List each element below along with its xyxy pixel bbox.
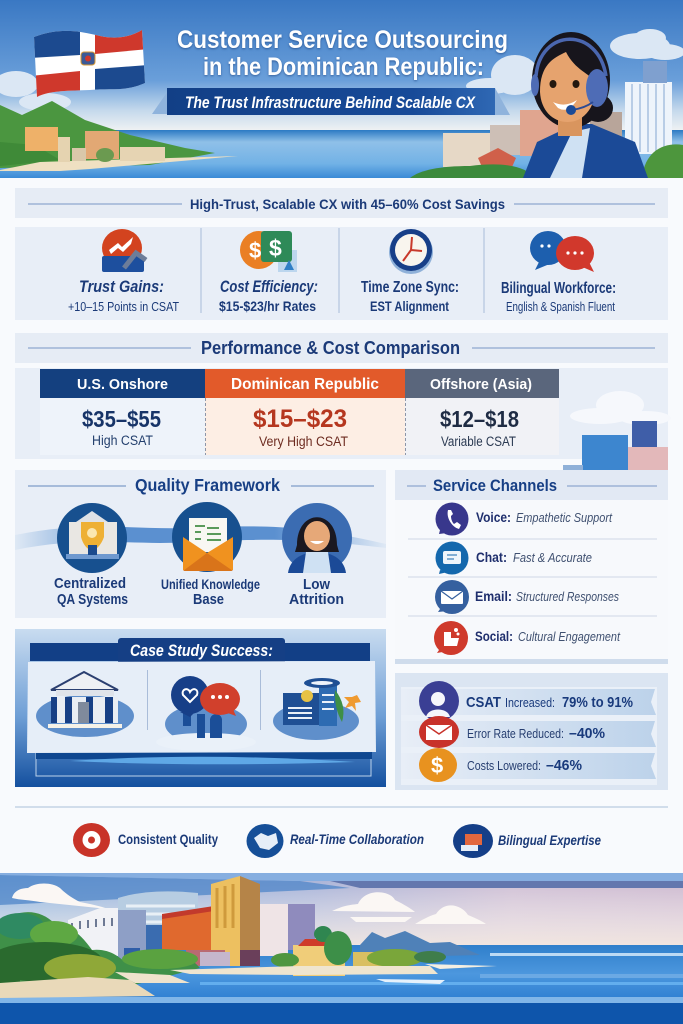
channel: voice: Voice: <box>476 509 511 525</box>
text: trust gains: +10–15 Points in CSAT <box>68 300 179 314</box>
column: Dominican Republic: Very High CSAT <box>259 434 348 449</box>
panel: comparison table <box>15 368 671 470</box>
tagline strip <box>15 188 668 218</box>
text: bilingual: Bilingual Workforce: <box>501 280 616 297</box>
text: time zone <box>361 279 459 314</box>
channel: social: Cultural Engagement <box>518 629 621 644</box>
metric: CSAT: CSAT <box>466 694 501 711</box>
channel: email <box>435 580 619 614</box>
mountains <box>360 931 480 958</box>
beaches <box>0 977 155 998</box>
subtitle ribbon <box>152 88 510 115</box>
metric: costs: –46% <box>546 757 582 774</box>
channel: social <box>434 621 621 655</box>
benefit: bilingual expertise <box>453 824 601 858</box>
metric: CSAT: Increased: <box>505 695 555 710</box>
metric: error rate: Error Rate Reduced: <box>467 726 564 741</box>
icon: bank <box>36 672 134 737</box>
text: time zone: Time Zone Sync: <box>361 279 459 296</box>
title: in the Dominican Republic: <box>203 53 484 81</box>
title: Customer Service Outsourcing <box>177 26 508 54</box>
channel: chat <box>436 542 592 574</box>
panel: service channels <box>395 470 668 664</box>
metric: CSAT: 79% to 91% <box>562 694 633 711</box>
text: cost efficiency <box>219 278 318 314</box>
text: bilingual: English & Spanish Fluent <box>506 300 615 314</box>
tagline strip: High-Trust, Scalable CX with 45–60% Cost Savings <box>190 196 505 212</box>
flag <box>34 30 145 97</box>
labels: Centralized <box>54 575 126 592</box>
metric: costs <box>419 748 582 782</box>
channel: chat: Fast & Accurate <box>513 550 592 565</box>
benefit: consistent quality: Consistent Quality <box>118 831 218 847</box>
labels: Base <box>193 591 224 608</box>
icon: trust gains <box>102 229 146 272</box>
metric: error rate: –40% <box>569 725 605 742</box>
icon: clock <box>389 229 433 274</box>
labels: Low <box>303 576 330 593</box>
column: U.S. onshore: $35–$55 <box>82 406 161 432</box>
footer coastal scene <box>0 873 683 1024</box>
panel: key benefits <box>15 227 668 320</box>
text: trust gains <box>68 277 179 314</box>
icon: heart and chat bubbles <box>156 676 256 751</box>
labels: QA Systems <box>57 591 128 608</box>
text: time zone: EST Alignment <box>370 298 449 314</box>
agent illustration <box>523 32 648 178</box>
icon: cost efficiency: $ <box>269 235 282 261</box>
heading: performance comparison: Performance & Cost Comparison <box>201 338 460 358</box>
benefit: bilingual expertise: Bilingual Expertise <box>498 832 601 848</box>
channel: email: Email: <box>475 588 512 604</box>
channel: voice: Empathetic Support <box>516 510 613 525</box>
labels <box>54 575 344 608</box>
case study title tab: Case Study Success: <box>130 642 273 660</box>
text: cost efficiency: $15-$23/hr Rates <box>219 298 316 314</box>
channel: chat: Chat: <box>476 549 507 565</box>
panel: quality framework: Quality Framework <box>135 475 280 495</box>
column: U.S. onshore <box>40 369 205 455</box>
metric: CSAT <box>419 681 633 721</box>
header banner <box>0 0 683 178</box>
left hill and beach <box>0 101 215 168</box>
channel: email: Structured Responses <box>516 589 619 604</box>
benefit: real-time collaboration <box>246 824 424 858</box>
column: U.S. onshore: High CSAT <box>92 433 153 448</box>
buildings <box>68 876 383 976</box>
text: trust gains: Trust Gains: <box>79 277 164 296</box>
city illustration <box>563 391 671 470</box>
clouds <box>0 29 683 111</box>
labels: Unified Knowledge <box>161 576 260 592</box>
column: Dominican Republic <box>205 369 405 455</box>
right foliage <box>410 164 535 178</box>
channel: voice <box>436 502 613 536</box>
icon: documents and star <box>273 678 361 740</box>
labels: Attrition <box>289 591 344 608</box>
panel: quality framework <box>15 470 386 618</box>
icon: centralized QA <box>57 503 127 573</box>
icon: cost efficiency: $ <box>249 238 261 263</box>
metric: error rate <box>419 716 605 748</box>
benefit: consistent quality <box>73 823 218 857</box>
text: bilingual <box>501 280 616 314</box>
icon: speech bubbles <box>530 231 594 272</box>
column: offshore Asia: Offshore (Asia) <box>430 376 532 393</box>
distant right town <box>443 61 672 167</box>
icon: low attrition person <box>282 503 352 573</box>
case study title tab <box>118 638 285 664</box>
column: Dominican Republic: Dominican Republic <box>231 376 379 393</box>
panel: case study <box>15 629 386 787</box>
icon: knowledge base <box>172 502 242 572</box>
column: Dominican Republic: $15–$23 <box>253 405 347 433</box>
benefit: real-time collaboration: Real-Time Collaboration <box>290 831 424 847</box>
icon: cost efficiency <box>240 231 297 272</box>
channel: social: Social: <box>475 628 513 644</box>
metric: costs: $ <box>431 753 443 778</box>
subtitle ribbon: The Trust Infrastructure Behind Scalable CX <box>185 94 476 112</box>
metric: costs: Costs Lowered: <box>467 758 541 773</box>
column: offshore Asia <box>405 369 559 455</box>
text: cost efficiency: Cost Efficiency: <box>220 278 318 296</box>
title <box>177 26 508 81</box>
column: offshore Asia: Variable CSAT <box>441 434 516 449</box>
panel: service channels: Service Channels <box>433 476 557 495</box>
panel: case study results <box>395 673 668 790</box>
column: offshore Asia: $12–$18 <box>440 406 519 432</box>
column: U.S. onshore: U.S. Onshore <box>77 377 168 393</box>
trees <box>0 912 446 986</box>
clouds <box>12 884 486 924</box>
heading: performance comparison <box>15 333 668 363</box>
